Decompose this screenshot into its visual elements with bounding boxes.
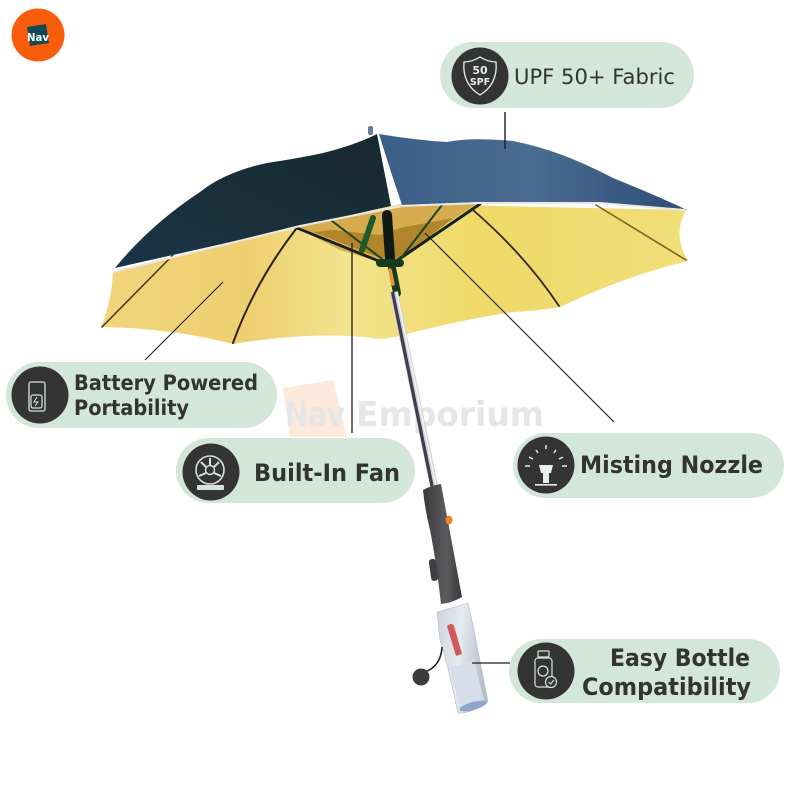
logo badge xyxy=(12,8,64,62)
icon: SPF shield xyxy=(452,48,508,104)
callout: Misting Nozzle xyxy=(513,433,784,498)
watermark: Nav Emporium xyxy=(283,380,544,437)
callout: Built-In Fan xyxy=(176,438,415,503)
icon: SPF shield: SPF xyxy=(470,77,490,88)
callout: UPF 50+ Fabric xyxy=(440,42,694,108)
callout: Easy Bottle Compatibility xyxy=(509,639,780,703)
umbrella canopy dark left panel xyxy=(115,134,391,268)
umbrella inner gold cone xyxy=(297,203,478,265)
label: Built-In Fan xyxy=(254,459,400,487)
icon: SPF shield: 50 xyxy=(472,64,488,77)
callout: Easy Bottle Compatibility: Compatibility xyxy=(582,673,751,701)
cord and ball xyxy=(412,647,442,686)
umbrella tip xyxy=(368,126,373,135)
callout: Battery Powered Portability: Portability xyxy=(74,396,189,420)
watermark: Nav Emporium: Emporium xyxy=(356,395,544,435)
label: Battery Powered xyxy=(74,371,258,395)
umbrella canopy yellow underside xyxy=(101,204,688,344)
label: UPF 50+ Fabric xyxy=(514,65,675,89)
umbrella illustration xyxy=(101,126,688,713)
watermark: Nav Emporium: Nav xyxy=(285,395,345,435)
icon: nozzle xyxy=(518,436,574,494)
water bottle xyxy=(437,603,488,713)
label: Misting Nozzle xyxy=(580,451,763,479)
umbrella ribs xyxy=(102,204,686,343)
umbrella shaft xyxy=(392,292,436,486)
umbrella canopy blue right panel xyxy=(379,134,687,210)
umbrella handle xyxy=(423,484,462,604)
icon: fan xyxy=(182,444,240,500)
connector lines xyxy=(145,112,614,663)
label: Easy Bottle xyxy=(610,644,750,672)
icon: bottle check xyxy=(518,642,574,700)
icon: battery phone xyxy=(12,366,68,424)
umbrella white trim xyxy=(113,203,685,272)
logo badge: Nav xyxy=(27,31,50,44)
callout: Battery Powered Portability xyxy=(6,362,277,428)
